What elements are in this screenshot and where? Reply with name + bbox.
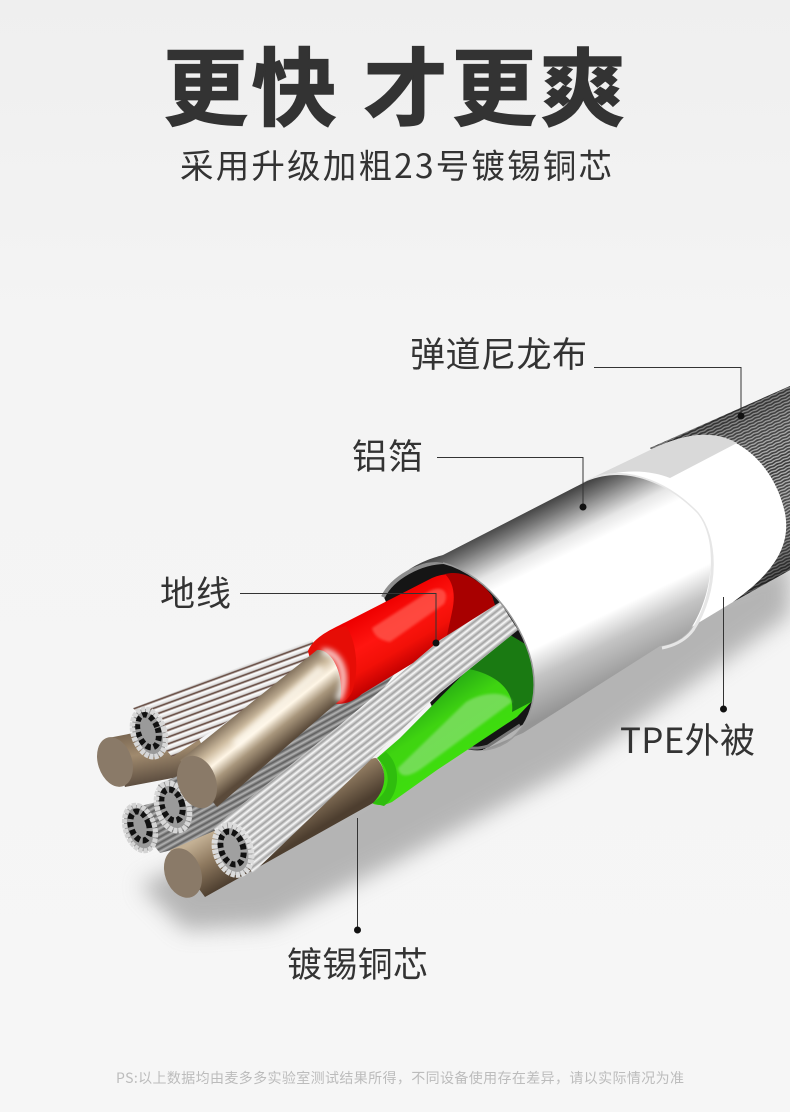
cast shadow — [140, 560, 790, 930]
back copper core — [91, 722, 215, 792]
lower copper core — [157, 758, 384, 903]
callout: TPE jacket — [620, 597, 755, 764]
callout: tinned copper core: 镀锡铜芯 — [287, 937, 428, 988]
back tinned strands — [126, 639, 320, 762]
middle strands — [150, 660, 405, 838]
braided nylon sleeve — [650, 386, 790, 602]
footnote: PS:以上数据均由麦多多实验室测试结果所得，不同设备使用存在差异，请以实际情况为准 — [116, 1068, 684, 1088]
callout: tinned copper core — [287, 818, 428, 988]
left lower strands — [118, 796, 218, 855]
callout: aluminium foil: 铝箔 — [352, 429, 423, 480]
subtitle: 采用升级加粗23号镀锡铜芯 — [180, 139, 612, 188]
foil shield — [405, 475, 711, 750]
main copper core — [170, 650, 343, 814]
callout: ground wire: 地线 — [160, 566, 231, 617]
front tinned strands — [208, 602, 518, 880]
red insulated wire — [308, 573, 497, 704]
callout: ballistic nylon: 弹道尼龙布 — [410, 327, 587, 378]
callout: TPE jacket: TPE外被 — [620, 713, 755, 764]
title: 更快 才更爽 — [163, 21, 625, 144]
callout: ballistic nylon — [410, 327, 744, 420]
callout: aluminium foil — [352, 429, 586, 510]
TPE jacket — [577, 435, 786, 648]
callout: ground wire — [160, 566, 440, 646]
cable illustration — [91, 386, 790, 930]
green insulated wire — [372, 632, 538, 806]
foil interior — [383, 556, 540, 750]
